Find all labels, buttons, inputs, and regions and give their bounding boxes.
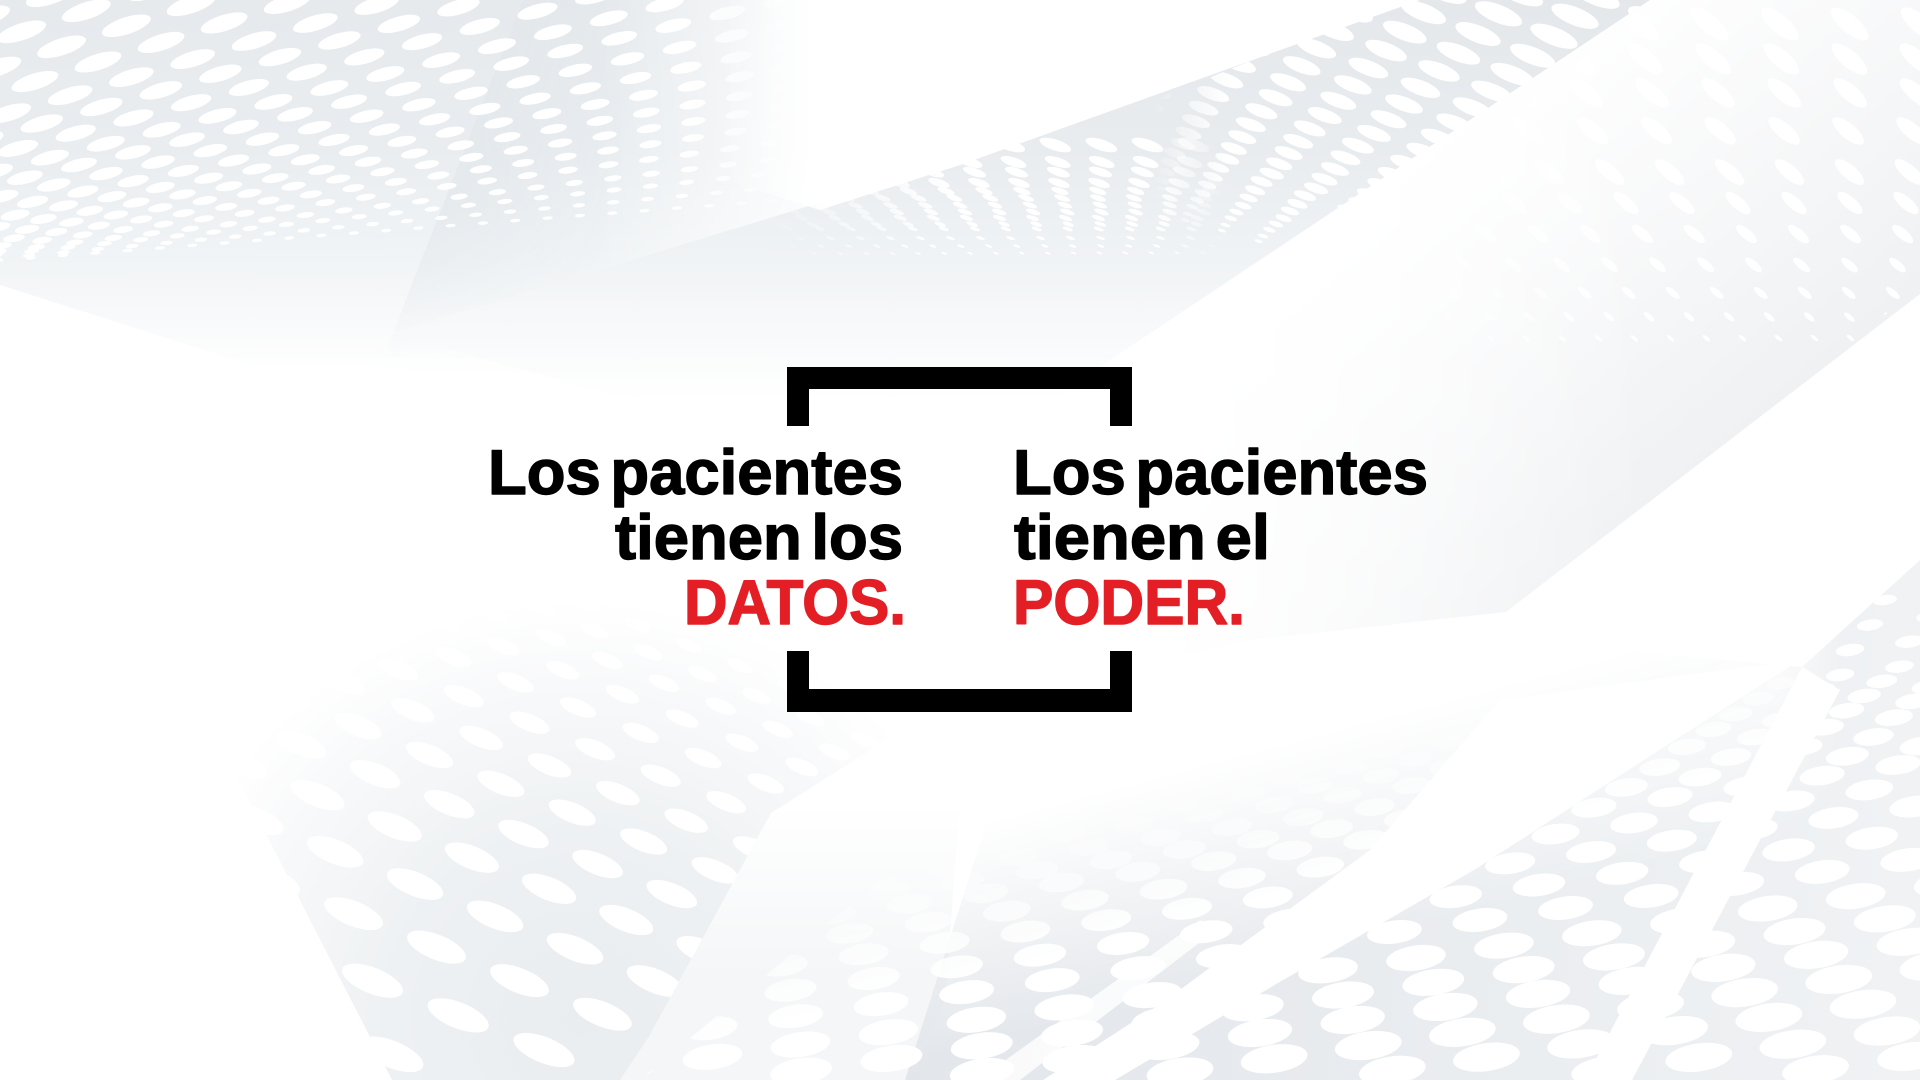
background: top-left halftone dots bbox=[0, 0, 728, 262]
right statement: patients have the power: Los pacientes bbox=[1013, 438, 1428, 508]
background: soft white clearing at top centre bbox=[808, 0, 1420, 210]
top bracket bbox=[787, 367, 1132, 426]
background: top-right pale facet bbox=[1449, 30, 1920, 618]
left statement: patients have the data: tienen los bbox=[615, 503, 903, 573]
right statement: patients have the power bbox=[1013, 438, 1428, 638]
background: lower-right halftone dots bbox=[646, 595, 1920, 1080]
left statement: patients have the data: Los pacientes bbox=[488, 438, 903, 508]
background: top-centre halftone dots, right part bbox=[1180, 0, 1640, 243]
right statement: patients have the power: PODER. bbox=[1013, 568, 1245, 638]
background: lower-centre pale facet bbox=[620, 940, 945, 1080]
background: top-left crease shading bbox=[426, 222, 443, 250]
background: lower-right grey facet bbox=[905, 560, 1920, 1080]
bottom bracket bbox=[787, 651, 1132, 712]
background: top-centre grey band bbox=[722, 0, 1650, 324]
background: top-right faint halftone dots bbox=[1622, 24, 1920, 342]
right statement: patients have the power: tienen el bbox=[1014, 503, 1270, 573]
background: lower-left halftone dots bbox=[288, 699, 784, 1072]
left statement: patients have the data: DATOS. bbox=[684, 568, 906, 638]
left statement: patients have the data bbox=[488, 438, 906, 638]
background: top-centre halftone dots, left part bbox=[850, 138, 1200, 254]
background: top-left grey facet bbox=[0, 0, 748, 308]
background: lower-left grey facet bbox=[288, 699, 806, 1080]
background: white diagonal stripes bbox=[1003, 668, 1840, 1080]
